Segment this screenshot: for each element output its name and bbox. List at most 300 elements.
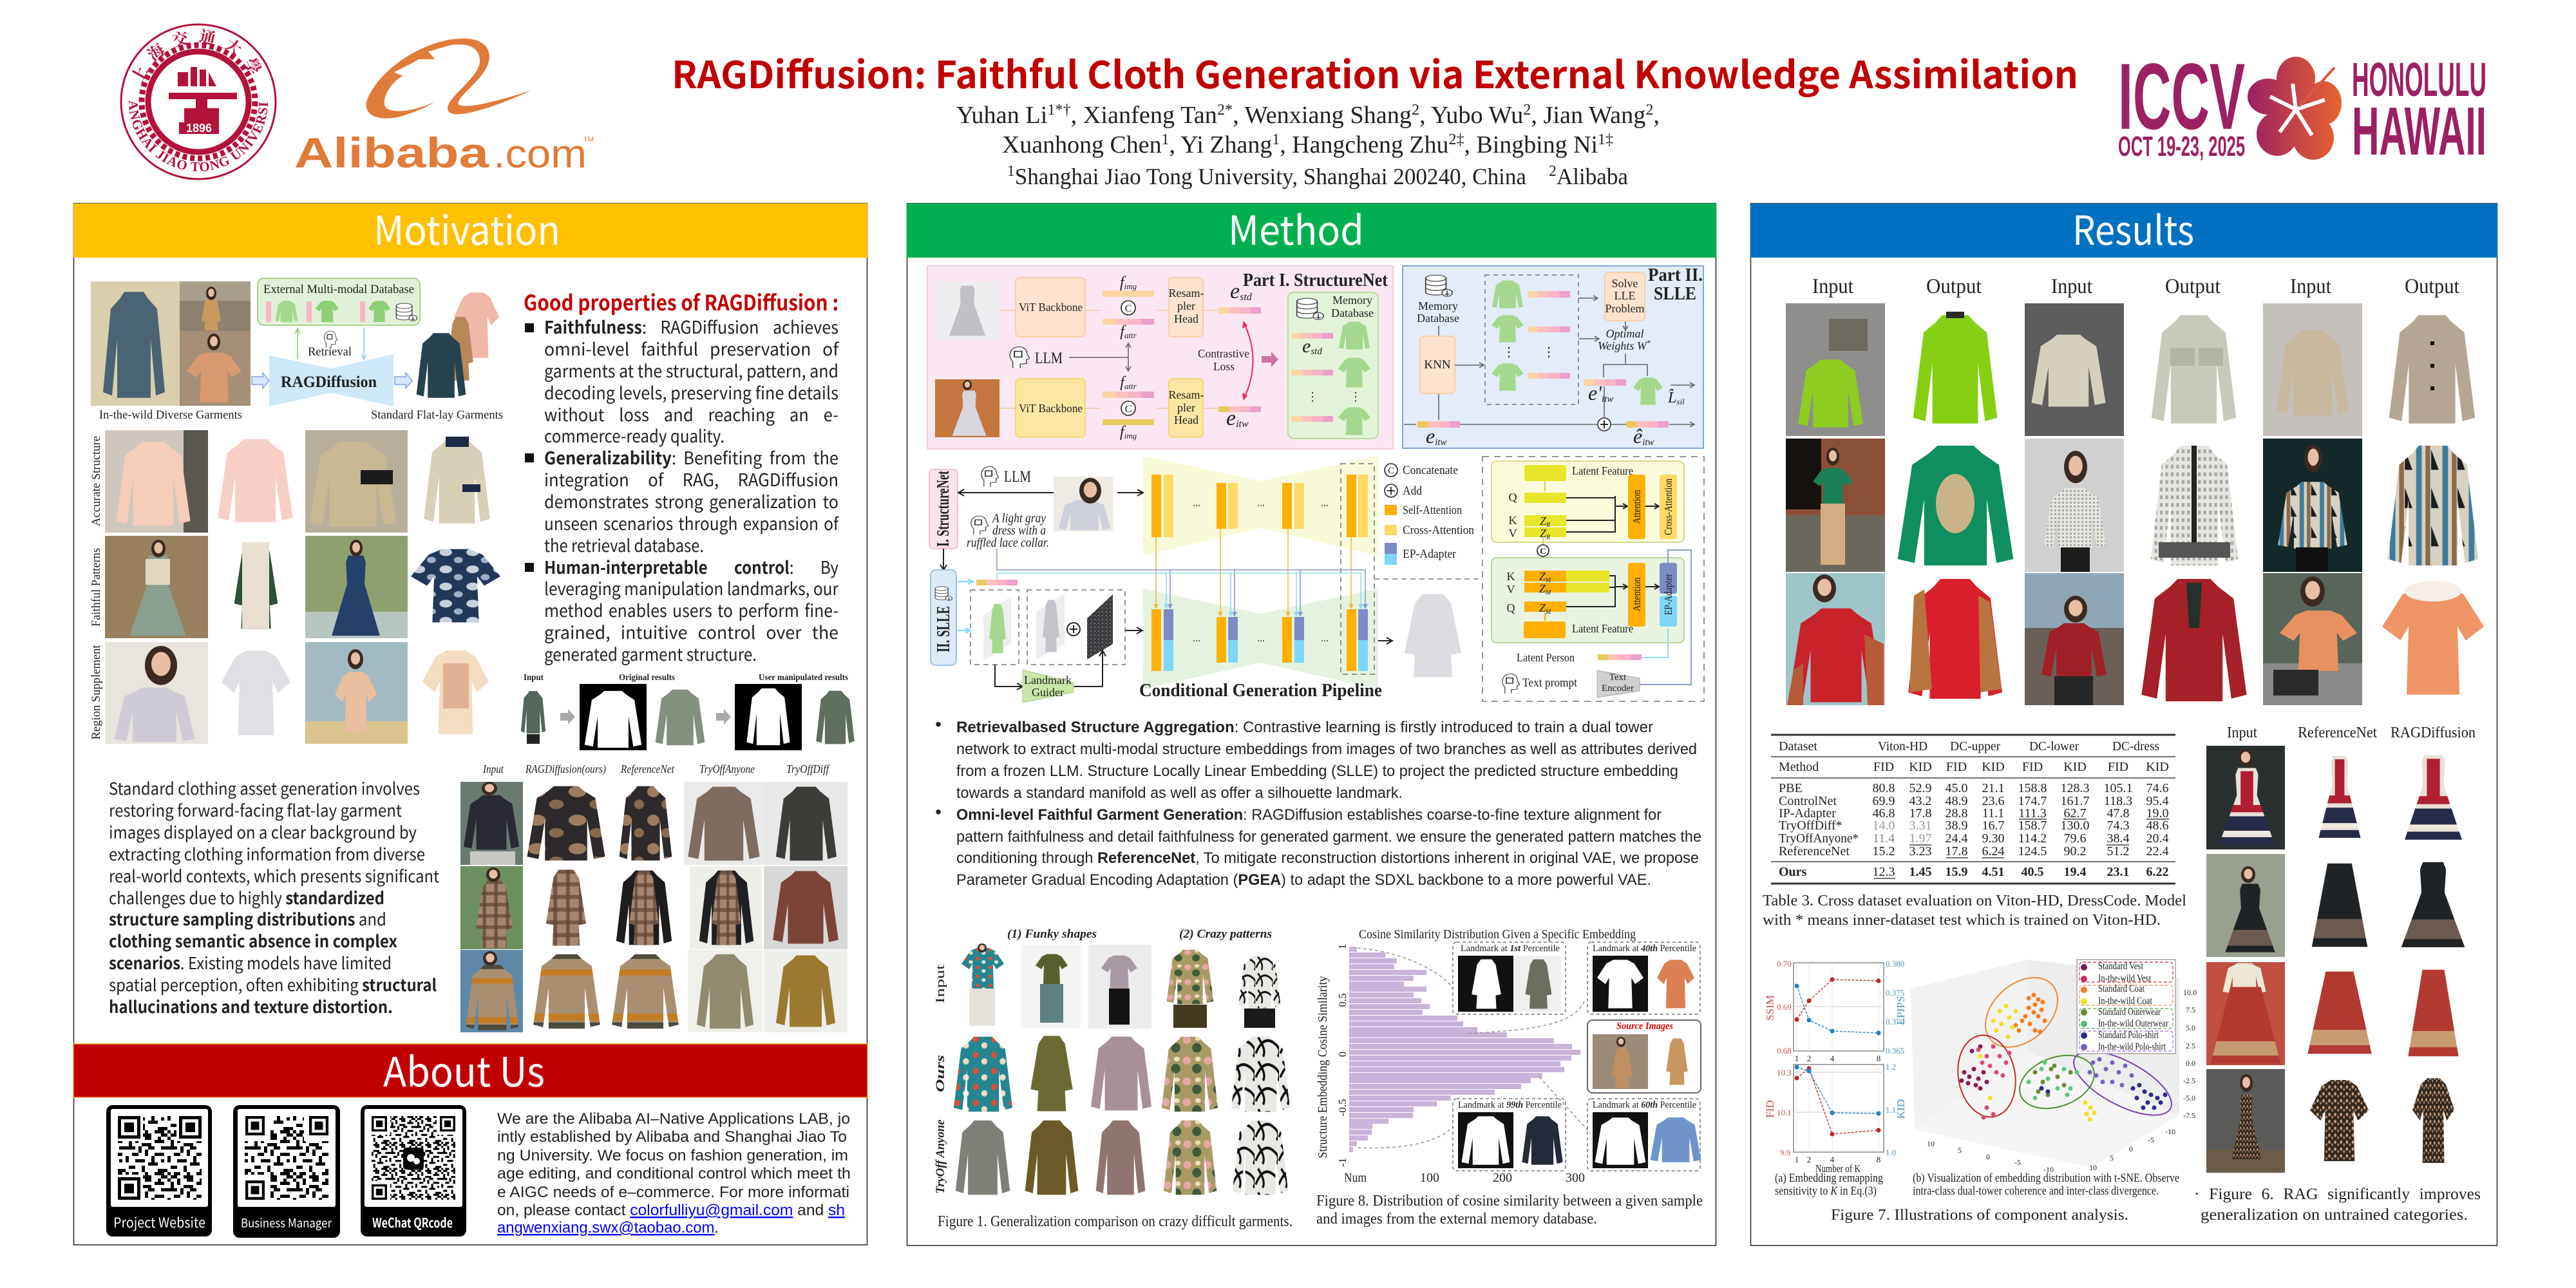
table caption: Table 3. Cross dataset evaluation on Viton-HD, DressCode. Model: [1763, 893, 2186, 909]
landmark 1st percentile: Landmark at 1st Percentile: [1461, 943, 1560, 954]
table 3: cross dataset evaluation: [1771, 735, 2175, 884]
scatter points: [1962, 995, 2165, 1119]
diagram: attention details: [1482, 457, 1704, 701]
figure 6 column labels: RAGDiffusion: [2391, 724, 2476, 741]
text prompt and encoder: [1502, 550, 1691, 697]
LLM: LLM: [1035, 350, 1063, 367]
figure 6 column labels: [2227, 724, 2476, 741]
ViT backbones: ViT Backbone: [1019, 301, 1083, 314]
embedding bars: e: [1230, 279, 1240, 303]
authors and affiliations: , Bingbing Ni: [1464, 131, 1598, 158]
diagram: Part I StructureNet: Part I. StructureNet: [1243, 270, 1388, 290]
feature bars and concat: f: [1120, 374, 1124, 391]
table method names: IP-Adapter: [1779, 806, 1836, 820]
feature bars and concat: [1103, 274, 1154, 440]
upper U-Net blocks: ...: [1257, 498, 1265, 509]
table values: 15.9: [1945, 865, 1968, 879]
cross-attention block: Latent Feature: [1572, 464, 1633, 477]
table headers: DC-dress: [2112, 739, 2159, 753]
logo: ICCV 2025 Honolulu Hawaii: [2118, 44, 2486, 169]
lower chart: 1: [1795, 1155, 1799, 1164]
text block: method bullets: pattern faithfulness and detail faithfulness for generated garment. we ensure the generated pattern matches the: [956, 828, 1701, 846]
RAGDiffusion bowtie: RAGDiffusion: [281, 374, 377, 391]
table values: 11.4: [1873, 831, 1895, 846]
column labels: Input: [482, 762, 504, 775]
authors and affiliations: , Hangcheng Zhu: [1280, 131, 1449, 158]
3D axis ticks: 5: [2110, 1153, 2114, 1162]
table values: 11.1: [1982, 806, 2004, 820]
column labels: RAGDiffusion(ours): [525, 762, 606, 776]
landmark 60th percentile: Landmark at 60th Percentile: [1593, 1100, 1696, 1110]
table values: 114.2: [2018, 831, 2047, 846]
landmark guider: Landmark: [1024, 674, 1072, 687]
row labels: Region Supplement: [90, 645, 103, 739]
text prompt and encoder: Text prompt: [1522, 676, 1578, 690]
table headers: FID: [1873, 760, 1894, 774]
heading: motivation: [73, 198, 867, 258]
QR card: business manager: Business Manager: [241, 1214, 332, 1231]
table headers: KID: [1909, 760, 1932, 774]
figure 6 caption: [2194, 1186, 2481, 1224]
bullet list: good properties: leveraging manipulation landmarks, our: [544, 575, 838, 600]
results column labels: Output: [2165, 275, 2221, 298]
memory database and KNN: [1417, 275, 1484, 420]
text block: method bullets: •: [935, 802, 942, 822]
logo: Alibaba.com: .com: [493, 132, 587, 176]
EP-adapter block: Q: [1507, 601, 1515, 614]
bullet list: good properties: method enables users to perform fine-: [544, 597, 838, 622]
heading: results: Results: [2072, 198, 2194, 256]
3D axis ticks: [1927, 988, 2197, 1174]
scatter legend: In-the-wild Polo-shirt: [2098, 1041, 2166, 1052]
arrows: retrieval up and down: [295, 328, 366, 359]
EP-adapter block: M: [1545, 577, 1551, 584]
upper chart: 0.365: [1886, 1046, 1904, 1056]
text prompt: ruffled lace collar.: [967, 536, 1049, 550]
table values: 15.2: [1873, 844, 1895, 858]
concat symbol: [1537, 537, 1549, 567]
text prompt and encoder: Encoder: [1602, 683, 1634, 694]
heading: motivation: Motivation: [374, 198, 560, 256]
memory database: Memory: [1332, 294, 1372, 307]
text block: problem statement: restoring forward-facing flat-lay garment: [109, 798, 402, 822]
main flow: [1404, 386, 1694, 448]
table caption: [1763, 893, 2186, 929]
database box: [258, 278, 420, 325]
table values: 28.8: [1945, 806, 1968, 820]
legend: Concatenate: [1403, 464, 1458, 477]
diagram: Part I StructureNet: [927, 266, 1393, 449]
feature bars and concat: attr: [1124, 381, 1137, 391]
text block: about us: on, please contact colorfulliyu@gmail.com and sh: [497, 1202, 845, 1219]
heading: results: [1750, 198, 2497, 258]
leader curves: [1358, 948, 1591, 1148]
bullet list: good properties: omni-level faithful preservation of: [544, 336, 839, 361]
table values: 23.1: [2107, 865, 2129, 879]
x labels: 200: [1493, 1171, 1512, 1185]
memory database and KNN: Database: [1417, 312, 1459, 325]
figure 7 captions: (a) Embedding remapping: [1775, 1171, 1883, 1185]
resampler heads: Resam-: [1169, 287, 1204, 299]
text block: problem statement: spatial perception, often exhibiting structural: [109, 972, 437, 996]
memory database: ⋮: [1350, 390, 1361, 403]
heading: about us: [73, 1040, 867, 1099]
logo: ICCV 2025 Honolulu Hawaii: OCT 19-23, 2025: [2118, 131, 2245, 162]
figure 8 caption: [1316, 1193, 1703, 1227]
table method names: ControlNet: [1779, 794, 1837, 808]
concat symbol: C: [1540, 546, 1546, 556]
SLLE output bar: [958, 579, 1018, 633]
table values: 90.2: [2063, 844, 2087, 858]
text prompt: [967, 511, 1049, 550]
figure 8 caption: and images from the external memory database.: [1316, 1211, 1597, 1227]
3D axis ticks: -10: [2043, 1165, 2054, 1174]
figure 1 ours row: [954, 1036, 1290, 1112]
table values: 80.8: [1873, 781, 1895, 795]
3D axes panes: [1911, 960, 2179, 1168]
x labels: Num: [1344, 1171, 1367, 1185]
stage box: SLLE: [931, 570, 956, 665]
projected embedding: e': [1588, 381, 1602, 404]
figure 8: cosine similarity distribution: [1316, 927, 1703, 1227]
table values: [1873, 781, 2169, 879]
upper chart: SSIM: [1764, 995, 1776, 1021]
RAGDiffusion bowtie: [269, 354, 393, 406]
logo: Shanghai Jiao Tong University seal: 1896: [186, 122, 212, 135]
table headers: Viton-HD: [1878, 739, 1927, 753]
photos: in-the-wild garments: [91, 281, 251, 406]
figure 8 title: Cosine Similarity Distribution Given a Specific Embedding: [1359, 927, 1636, 942]
heading: about us: About Us: [383, 1040, 545, 1099]
table underlines: [1874, 819, 2169, 878]
figure 6 column labels: ReferenceNet: [2298, 724, 2377, 741]
table values: 19.0: [2146, 806, 2169, 820]
3D axis ticks: 7.5: [2186, 1005, 2195, 1014]
text block: method bullets: •: [935, 714, 942, 734]
upper chart: LPIPS: [1895, 996, 1907, 1025]
resampler heads: Head: [1174, 312, 1198, 325]
authors and affiliations: 1‡: [1598, 131, 1613, 148]
table method names: Ours: [1779, 865, 1807, 879]
cross-attention block: [1492, 461, 1684, 542]
text block: problem statement: scenarios. Existing models have limited: [109, 951, 392, 974]
table values: 6.24: [1982, 844, 2004, 858]
figure 7b: t-SNE 3D scatter: [1911, 960, 2197, 1174]
table values: 23.6: [1982, 794, 2004, 808]
lower chart: KID: [1895, 1099, 1907, 1119]
arrow: stage I to II: [940, 549, 947, 570]
neighbours: [1485, 275, 1578, 404]
figure 1 row labels: Input: [934, 964, 947, 1003]
3D axis ticks: 0: [2129, 1144, 2133, 1153]
table values: 3.23: [1909, 844, 1932, 858]
source images: [1587, 1020, 1701, 1093]
LLE solve: Weights W: [1598, 339, 1647, 352]
bullet list: good properties: Human-interpretable control: By: [544, 554, 838, 579]
table values: 158.7: [2018, 819, 2047, 833]
text block: problem statement: hallucinations and texture distortion.: [109, 994, 393, 1018]
stage box: SLLE: II. SLLE: [934, 606, 954, 652]
table values: 46.8: [1873, 806, 1895, 820]
text block: about us: ng University. We focus on fashion generation, im: [497, 1147, 848, 1164]
text block: problem statement: [109, 776, 439, 1018]
LLE solve: Optimal: [1605, 327, 1644, 340]
table method names: ReferenceNet: [1779, 844, 1850, 858]
3D axis ticks: 2.5: [2186, 1041, 2195, 1050]
text block: problem statement: Standard clothing asset generation involves: [109, 776, 420, 800]
figure 1 row labels: Ours: [934, 1055, 947, 1092]
lower chart: 1.1: [1886, 1105, 1896, 1115]
landmark guider: [995, 650, 1106, 703]
resampler heads: Head: [1174, 413, 1198, 426]
results column labels: Output: [2405, 275, 2459, 298]
caption: flat-lay: Standard Flat-lay Garments: [371, 408, 503, 422]
upper chart: 8: [1877, 1054, 1880, 1063]
results row 3: [1786, 573, 2484, 705]
output garment: [1378, 594, 1461, 677]
authors and affiliations: Xuanhong Chen: [1002, 131, 1162, 158]
EP-adapter block: [1492, 558, 1684, 643]
histogram bars: [1349, 947, 1580, 1152]
bullet list: good properties: the retrieval database.: [544, 532, 704, 557]
legend: Cross-Attention: [1403, 524, 1474, 537]
panel: motivation: [73, 198, 867, 1245]
table method names: TryOffAnyone*: [1779, 831, 1859, 846]
memory database: Database: [1331, 307, 1374, 319]
flat-lay garments: [417, 292, 499, 398]
y ticks: 0.5: [1336, 993, 1349, 1007]
figure 6 row 1: [2206, 746, 2462, 849]
cross-attention block: Attention: [1631, 489, 1643, 524]
table values: 174.7: [2018, 794, 2047, 808]
lower chart: 10.3: [1777, 1068, 1792, 1077]
bullet list: good properties: commerce-ready quality.: [544, 422, 724, 448]
contrastive loss: Loss: [1213, 360, 1235, 373]
3D axis ticks: -2.5: [2183, 1076, 2195, 1085]
x labels: 100: [1420, 1171, 1439, 1185]
landmark 40th percentile: [1587, 942, 1700, 1014]
x axis title: Number of K: [1815, 1162, 1861, 1175]
logo: Alibaba.com: [294, 39, 594, 176]
table values: 1.97: [1909, 831, 1932, 846]
upper chart: 0.380: [1886, 959, 1904, 969]
figure 7 captions: [1775, 1171, 2179, 1224]
upper U-Net blocks: ...: [1193, 498, 1200, 509]
landmark 99th percentile: Landmark at 99th Percentile: [1458, 1100, 1562, 1110]
arrow: to memory: [1262, 352, 1278, 367]
figure 1 column titles: [1007, 927, 1272, 941]
embedding bars: itw: [1236, 419, 1249, 430]
table values: 16.7: [1982, 819, 2004, 833]
bullet list: good properties: demonstrates strong generalization to: [544, 488, 838, 513]
figure 6: generalization on untrained categories: [2194, 724, 2481, 1224]
table values: 45.0: [1945, 781, 1968, 795]
text block: problem statement: extracting clothing information from diverse: [109, 842, 425, 866]
cross-attention block: Cross-Attention: [1662, 478, 1674, 535]
QR card: business manager: [233, 1105, 340, 1238]
lower chart: 1.2: [1886, 1062, 1896, 1072]
title: SLLE: [1654, 284, 1696, 304]
figure 8 caption: Figure 8. Distribution of cosine similarity between a given sample: [1316, 1193, 1703, 1209]
projected embedding: itw: [1602, 394, 1613, 404]
lower chart: 4: [1830, 1155, 1835, 1164]
3D axis ticks: -7.5: [2183, 1111, 2195, 1120]
heading: method: Method: [1228, 198, 1364, 256]
upper chart: 2: [1807, 1054, 1811, 1063]
title: [1648, 265, 1703, 304]
table values: 130.0: [2061, 819, 2089, 833]
table values: 52.9: [1909, 781, 1932, 795]
ViT backbones: ViT Backbone: [1019, 402, 1083, 415]
stage box: StructureNet: I. StructureNet: [933, 471, 952, 547]
authors and affiliations: 2: [1412, 102, 1419, 118]
projected embedding: [1584, 377, 1694, 406]
authors and affiliations: 2*: [1217, 102, 1233, 118]
authors and affiliations: [956, 102, 1660, 189]
table headers: DC-lower: [2029, 739, 2079, 753]
projected embedding: sil: [1676, 397, 1685, 406]
image grid: accurate structure: [105, 430, 490, 533]
figure 1 input row: [961, 943, 1281, 1028]
row labels: [90, 436, 103, 739]
table headers: KID: [2063, 760, 2087, 774]
text block: problem statement: images displayed on a clear background by: [109, 820, 417, 844]
bullet list: good properties: decoding levels, preserving fine details: [544, 379, 838, 404]
feature bars and concat: f: [1120, 274, 1124, 291]
neighbours: ⋮: [1542, 345, 1555, 359]
cross-attention block: Z: [1540, 515, 1546, 527]
text block: method bullets: conditioning through ReferenceNet, To mitigate reconstruction distortions inherent in original VAE, we propose: [956, 849, 1699, 867]
text block: method bullets: [935, 714, 1701, 889]
lower U-Net blocks: ...: [1193, 633, 1200, 644]
text block: method bullets: from a frozen LLM. Structure Locally Linear Embedding (SLLE) to project the predicted structure embedding: [956, 762, 1678, 780]
memory database: e: [1302, 336, 1311, 357]
table values: 62.7: [2063, 806, 2087, 820]
3D axis ticks: -5: [2148, 1135, 2154, 1144]
feature bars and concat: img: [1124, 281, 1137, 291]
authors and affiliations: Alibaba: [1557, 164, 1628, 189]
bullet list: good properties: garments at the structural, pattern, and: [544, 357, 838, 383]
QR card: project website: Project Website: [113, 1213, 205, 1232]
3D axis ticks: 0: [1986, 1152, 1990, 1161]
figure: manipulation strip: Input: [524, 673, 544, 683]
upper chart: [1764, 959, 1907, 1063]
database box: External Multi-modal Database: [263, 283, 414, 296]
authors and affiliations: 1: [1007, 163, 1015, 180]
y ticks: [1336, 944, 1349, 1167]
y ticks: -1: [1336, 1158, 1349, 1167]
memory database: ⋮: [1307, 390, 1318, 403]
figure 1 row labels: [934, 964, 947, 1194]
results column labels: Input: [1812, 275, 1853, 298]
table headers: KID: [2146, 760, 2169, 774]
table values: 105.1: [2103, 781, 2133, 795]
table values: 161.7: [2061, 794, 2089, 808]
bullet list: good properties: Faithfulness: RAGDiffusion achieves: [544, 314, 838, 339]
text block: about us: age editing, and conditional control which meet th: [497, 1165, 851, 1182]
scatter legend: Standard Polo-shirt: [2098, 1030, 2159, 1041]
table values: 12.3: [1873, 865, 1895, 879]
figure 7 captions: Figure 7. Illustrations of component analysis.: [1831, 1207, 2128, 1224]
y ticks: -0.5: [1336, 1099, 1349, 1116]
main flow: itw: [1642, 437, 1654, 448]
EP-adapter block: K: [1507, 570, 1515, 583]
LLE solve: *: [1647, 338, 1651, 347]
diagram: Part II SLLE: [1403, 265, 1703, 448]
lower chart: 8: [1877, 1155, 1880, 1164]
landmark 60th percentile: [1587, 1099, 1701, 1171]
lower chart: 9.9: [1780, 1148, 1790, 1157]
table values: 19.4: [2063, 865, 2087, 879]
text block: method bullets: towards a standard manifold as well as offer a silhouette landmark.: [956, 784, 1403, 802]
text block: problem statement: real-world contexts, which presents significant: [109, 864, 439, 887]
table headers: DC-upper: [1950, 739, 2000, 753]
results column labels: Output: [1926, 275, 1982, 298]
text block: about us: e AIGC needs of e–commerce. For more informati: [497, 1184, 849, 1201]
panel: results: [1750, 198, 2497, 1245]
logo: Alibaba.com: Alibaba: [294, 129, 490, 176]
EP-adapter block: Z: [1539, 570, 1546, 583]
legend: C: [1388, 466, 1394, 476]
table headers: Dataset: [1779, 739, 1817, 753]
table values: 48.9: [1945, 794, 1968, 808]
latent person: [1517, 628, 1668, 664]
table values: 51.2: [2107, 844, 2129, 858]
table values: 22.4: [2146, 844, 2169, 858]
landmark guider: Guider: [1032, 686, 1064, 699]
upper chart: 0.68: [1777, 1046, 1792, 1056]
dashed focus region: [1341, 464, 1374, 674]
LLE solve: LLE: [1614, 289, 1636, 302]
input garment images: [935, 281, 999, 437]
logo: Alibaba.com: TM: [583, 136, 594, 144]
embedding bars: e: [1226, 406, 1236, 430]
figure 1 row labels: TryOff Anyone: [934, 1119, 947, 1194]
bullet list: good properties: grained, intuitive control over the: [544, 619, 838, 644]
figure 6 row 3: [2206, 962, 2459, 1065]
feature bars and concat: C: [1125, 404, 1132, 415]
text block: method bullets: network to extract multi-modal structure embeddings from images of two branches as well as attributes derived: [956, 741, 1697, 758]
column labels: [482, 762, 831, 776]
ViT backbones: [1016, 278, 1085, 437]
lower U-Net blocks: ...: [1321, 633, 1329, 644]
embedding bars: [1218, 279, 1261, 430]
EP-adapter block: Z: [1539, 582, 1546, 595]
figure 7 captions: (b) Visualization of embedding distribution with t-SNE. Observe: [1913, 1171, 2179, 1185]
contrastive loss: Contrastive: [1198, 347, 1249, 360]
y ticks: 0: [1336, 1052, 1349, 1057]
resampler heads: [1169, 278, 1204, 437]
scatter legend: Standard Outerwear: [2098, 1007, 2161, 1018]
authors and affiliations: 2: [1523, 102, 1531, 118]
bullet list: good properties: unseen scenarios through expansion of: [544, 510, 839, 535]
figure 7a: line charts: [1764, 959, 1907, 1175]
figure 1 column titles: (2) Crazy patterns: [1179, 927, 1272, 941]
upper chart: 0.69: [1777, 1002, 1792, 1012]
main flow: e: [1426, 424, 1435, 448]
cross-attention block: K: [1508, 514, 1517, 527]
arrows: block arrows: [252, 373, 412, 388]
pipeline title: Conditional Generation Pipeline: [1139, 680, 1382, 701]
title: RAGDiffusion: Faithful Cloth Generation via External Knowledge Assimilation: [672, 45, 2078, 99]
feature bars and concat: f: [1120, 323, 1124, 340]
upper chart: 4: [1830, 1054, 1835, 1063]
text block: problem statement: challenges due to highly standardized: [109, 886, 384, 909]
scatter legend: [2077, 960, 2175, 1054]
authors and affiliations: 2: [1645, 102, 1653, 118]
row labels: Accurate Structure: [90, 436, 103, 526]
diagram: conditional generation pipeline: [929, 456, 1480, 703]
